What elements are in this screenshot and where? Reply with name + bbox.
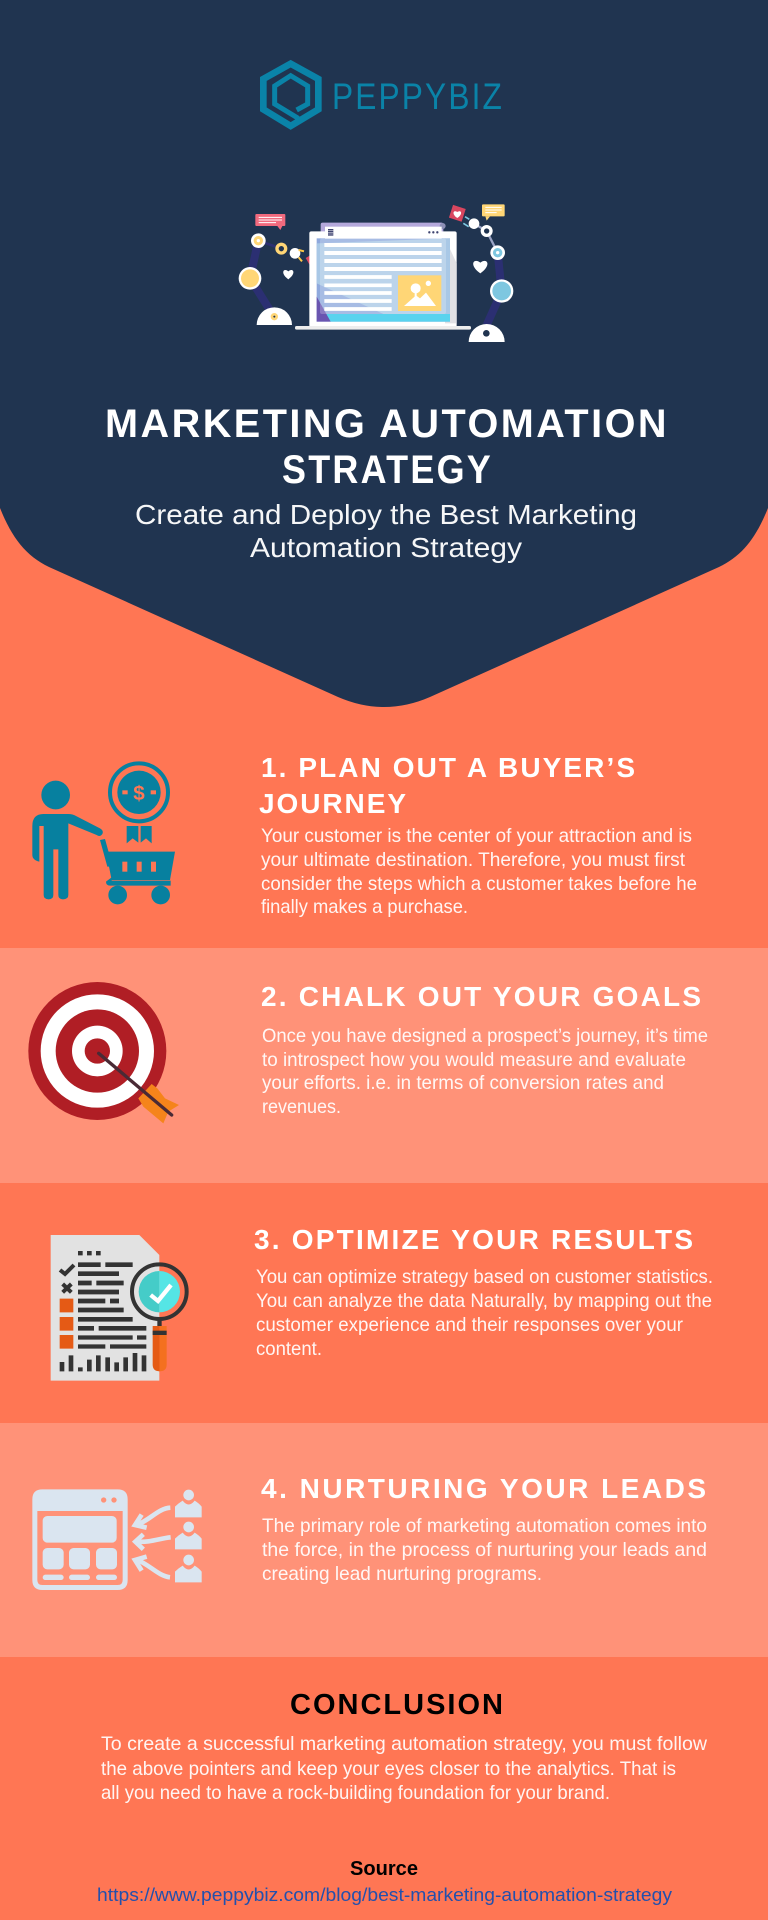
subtitle [135,499,637,563]
left robot arm [239,214,323,325]
logo mark [263,64,318,126]
step 3 body text: You can optimize strategy based on customer statistics. [256,1266,713,1288]
conclusion heading: CONCLUSION [290,1689,503,1721]
source [97,1858,673,1905]
step 3 body text [256,1266,713,1360]
step 1 body text: consider the steps which a customer takes before he [261,873,697,895]
step 3 body text: content. [256,1338,322,1360]
step 2 background [0,948,768,1183]
step 1 heading: JOURNEY [259,788,406,819]
step 2 body text: Once you have designed a prospect’s journey, it’s time [262,1025,708,1047]
panel: step 3 optimize your results [0,1183,768,1423]
step 1 heading [259,752,635,819]
subtitle: Create and Deploy the Best Marketing [135,499,637,530]
step 1 heading: 1. PLAN OUT A BUYER’S [261,752,635,783]
step 3 body text: You can analyze the data Naturally, by mapping out the [256,1290,712,1312]
step 2 heading: 2. CHALK OUT YOUR GOALS [261,981,701,1012]
conclusion body text: To create a successful marketing automation strategy, you must follow [101,1733,708,1755]
step 1 body text: your ultimate destination. Therefore, you must first [261,849,686,871]
step 1 body text: finally makes a purchase. [261,896,468,918]
title: MARKETING AUTOMATION [105,402,669,446]
step 1 body text [261,825,697,918]
logo wordmark: PEPPYBIZ [332,76,504,117]
icon: web page with leads pointing to it [32,1489,202,1590]
step 4 heading: 4. NURTURING YOUR LEADS [261,1473,706,1504]
step 3 heading: 3. OPTIMIZE YOUR RESULTS [254,1224,693,1255]
step 4 body text [262,1515,707,1585]
panel: step 1 plan out a buyer's journey [0,720,768,948]
laptop [295,223,471,330]
icon: person with shopping cart and dollar coin: $ [133,782,145,805]
right robot arm [449,204,513,342]
title [105,402,669,492]
panel: step 4 nurturing your leads [0,1423,768,1657]
source label: Source [350,1858,418,1880]
subtitle: Automation Strategy [250,532,522,563]
step 4 body text: the force, in the process of nurturing your leads and [262,1539,707,1561]
panel: step 2 chalk out your goals [0,948,768,1183]
icon: target with arrow [28,982,179,1123]
step 2 body text: to introspect how you would measure and evaluate [262,1049,686,1071]
panel: conclusion [101,1689,708,1804]
conclusion body text: all you need to have a rock-building foundation for your brand. [101,1782,610,1804]
step 2 body text: your efforts. i.e. in terms of conversion rates and [262,1072,664,1094]
header background [0,0,768,707]
step 4 body text: creating lead nurturing programs. [262,1563,542,1585]
title: STRATEGY [282,448,493,492]
step 3 body text: customer experience and their responses over your [256,1314,683,1336]
icon: person with shopping cart and dollar coin [32,763,175,904]
hero illustration: laptop with robot arms [239,204,513,342]
logo [263,64,504,126]
step 4 background [0,1423,768,1657]
conclusion body text: the above pointers and keep your eyes closer to the analytics. That is [101,1758,676,1780]
source url: https://www.peppybiz.com/blog/best-marketing-automation-strategy [97,1884,673,1905]
step 3 background [0,1183,768,1423]
step 1 background [0,720,768,948]
step 4 body text: The primary role of marketing automation comes into [262,1515,707,1537]
step 2 body text [262,1025,708,1118]
step 2 body text: revenues. [262,1096,341,1118]
panel: header [0,0,768,707]
conclusion body text [101,1733,708,1804]
icon: report with magnifying glass [51,1235,187,1381]
step 1 body text: Your customer is the center of your attraction and is [261,825,692,847]
